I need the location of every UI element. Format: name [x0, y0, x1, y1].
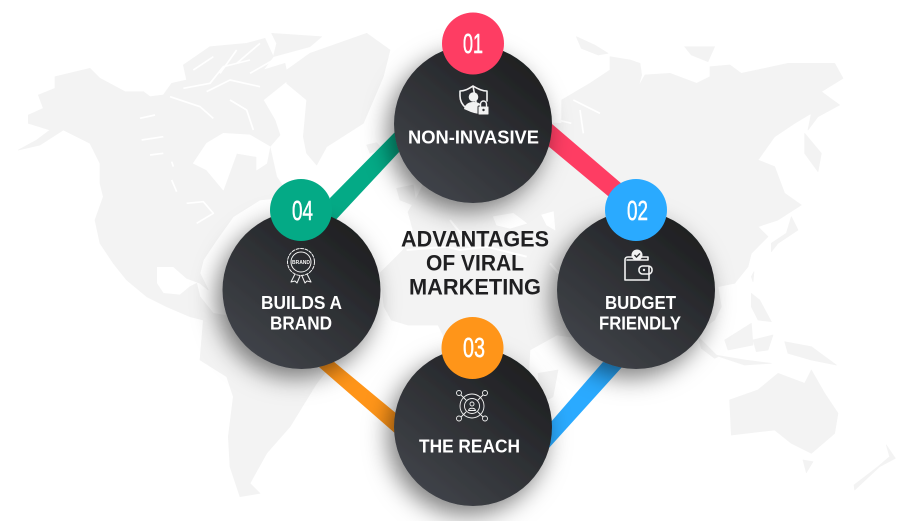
map: Eurasia and Africa	[380, 37, 895, 490]
node circle 03	[394, 348, 552, 506]
icon: wallet with check	[625, 250, 652, 280]
node 02: budget friendly: FRIENDLY	[599, 314, 681, 334]
connector: 04 to 01 green	[330, 131, 401, 225]
label: budget friendly: BUDGET	[605, 293, 676, 313]
node circle 02	[557, 211, 715, 369]
label: builds a brand: BUILDS A	[261, 293, 342, 313]
node 02: budget friendly	[557, 179, 715, 369]
node 01: non-invasive	[394, 12, 552, 203]
connector: 04 to 03 orange	[319, 361, 397, 435]
icon: shield with person and lock	[460, 86, 489, 115]
map: Americas and Greenland	[18, 33, 390, 497]
number badge 01: 01	[463, 28, 483, 59]
number badge 03	[442, 317, 504, 379]
icon: brand rosette: BRAND	[292, 260, 310, 266]
connector: 02 to 03 blue	[548, 362, 623, 449]
number badge 04	[270, 179, 332, 241]
node circle 01	[394, 45, 552, 203]
title: MARKETING	[409, 274, 541, 300]
number badge 01	[442, 12, 504, 74]
node 04: builds a brand: BRAND	[270, 314, 332, 334]
number badge 02: 02	[627, 195, 648, 226]
number badge 02	[605, 179, 667, 241]
label: the reach: THE REACH	[419, 436, 520, 456]
title	[401, 226, 549, 300]
number badge 04: 04	[292, 195, 313, 226]
title: OF VIRAL	[426, 250, 524, 276]
connector: 01 to 02 red	[548, 124, 622, 206]
icon: network target	[456, 390, 488, 421]
title: ADVANTAGES	[401, 226, 549, 252]
icon: brand rosette	[288, 248, 314, 283]
node circle 04	[222, 211, 380, 369]
number badge 03: 03	[463, 332, 485, 363]
node 04: builds a brand	[222, 179, 380, 369]
map: Mediterranean and British Isles	[397, 185, 562, 277]
node 03: the reach	[394, 317, 552, 506]
label: non-invasive: NON-INVASIVE	[408, 128, 539, 148]
